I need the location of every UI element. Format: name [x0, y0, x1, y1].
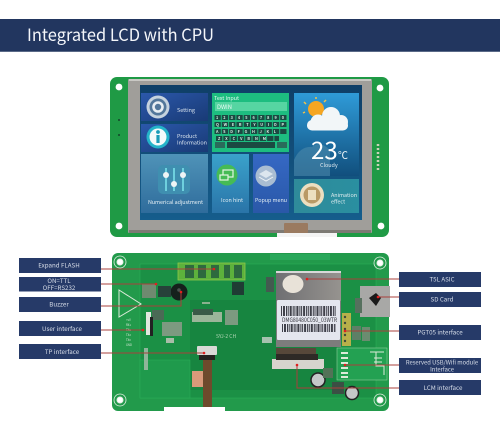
- icon: cloud: [307, 107, 348, 130]
- label: User interface: User interface: [42, 324, 83, 333]
- pin labels silkscreen: GND: [126, 343, 132, 347]
- title banner: [0, 19, 500, 52]
- tile: weather: [294, 93, 359, 176]
- tile: weather: ℃: [338, 147, 348, 162]
- pin labels silkscreen: TX0: [126, 338, 131, 342]
- pin labels silkscreen: TX2: [126, 333, 131, 337]
- buzzer: [170, 284, 188, 300]
- tile: animation effect: [294, 179, 359, 213]
- left labels: [19, 258, 101, 359]
- metal shield with label: [276, 271, 341, 347]
- tile: product information: [141, 124, 208, 152]
- LCM connector: [272, 348, 324, 369]
- label: Reserved USB/Wifi module Interface: [399, 358, 481, 374]
- chips and components: [142, 277, 274, 370]
- tile: text input keyboard: DWIN: [217, 102, 232, 111]
- pin labels silkscreen: RX1: [126, 323, 131, 327]
- right labels: [399, 272, 481, 395]
- tile: text input keyboard: Z X C V B N M: [218, 137, 266, 142]
- SD card slot: [355, 286, 390, 317]
- label: Expand FLASH: Expand FLASH: [38, 260, 80, 270]
- red callout lines and dots: [101, 268, 399, 388]
- label: ON=TTL OFF=RS232: [19, 276, 101, 292]
- tile: text input keyboard: 1 2 3 4 5 6 7 8 9 0: [216, 116, 285, 121]
- green PCB: [112, 253, 389, 411]
- tile: weather: Cloudy: [320, 161, 338, 169]
- barcode: [281, 311, 336, 328]
- tile: numerical adjustment: Numerical adjustment: [148, 198, 203, 206]
- label: LCM interface: LCM interface: [424, 383, 463, 392]
- label: PGT05 interface: PGT05 interface: [417, 328, 463, 336]
- triangle silkscreen logo: [119, 290, 141, 317]
- flash memory area: [178, 263, 245, 280]
- pin labels silkscreen: +5V: [126, 318, 131, 322]
- TP connector and flex cable: [192, 346, 217, 407]
- tile: icon hint: [212, 154, 249, 213]
- metal touch panel bezel: [128, 79, 372, 237]
- reserved USB/WiFi area: [337, 348, 387, 380]
- back view of circuit board: [112, 253, 390, 412]
- label: Buzzer: Buzzer: [49, 300, 69, 308]
- tile: product information: Product: [177, 132, 197, 140]
- tile: text input keyboard: Q W E R T Y U I O P: [216, 123, 284, 128]
- tile: animation effect: effect: [331, 198, 345, 206]
- capacitors: [311, 368, 358, 400]
- label: ON=TTL OFF=RS232: OFF=RS232: [43, 283, 76, 292]
- tile: numerical adjustment: [141, 154, 208, 213]
- tile: weather: 23: [311, 131, 338, 166]
- pin labels silkscreen: TX1: [126, 328, 131, 332]
- mounting holes: [117, 259, 383, 403]
- front view of LCD module: [110, 77, 389, 237]
- green front circuit board: [110, 77, 389, 237]
- tile: setting: Setting: [177, 106, 195, 114]
- PGT05 header: [342, 313, 370, 346]
- PCB traces and regions: [140, 254, 376, 412]
- silkscreen code: SYJ-2 CH: [216, 333, 236, 340]
- tile: popup menu: Popup menu: [255, 196, 287, 204]
- metal shield with label: DMG80480C050_03WTR: [282, 315, 337, 324]
- keyboard keys: [214, 118, 287, 138]
- label: SD Card: SD Card: [431, 294, 454, 304]
- tile: text input keyboard: [212, 93, 289, 152]
- tile: icon hint: Icon hint: [221, 196, 243, 204]
- label: Reserved USB/Wifi module Interface: Interface: [430, 364, 454, 374]
- label: T5L ASIC: T5L ASIC: [429, 274, 455, 284]
- title: Integrated LCD with CPU: [27, 21, 214, 46]
- pin labels silkscreen: [126, 318, 132, 347]
- tile: text input keyboard: A S D F G H J K L: [215, 130, 277, 135]
- label: TP interface: TP interface: [45, 347, 80, 356]
- label: ON=TTL OFF=RS232: ON=TTL: [47, 276, 71, 285]
- tile: setting: [141, 93, 208, 121]
- tile: product information: Information: [177, 138, 207, 146]
- tile: text input keyboard: Text Input: [214, 94, 239, 102]
- label: Reserved USB/Wifi module Interface: Reserved USB/Wifi module: [406, 358, 478, 366]
- tile: popup menu: [253, 154, 289, 213]
- tile: animation effect: Animation: [331, 191, 357, 199]
